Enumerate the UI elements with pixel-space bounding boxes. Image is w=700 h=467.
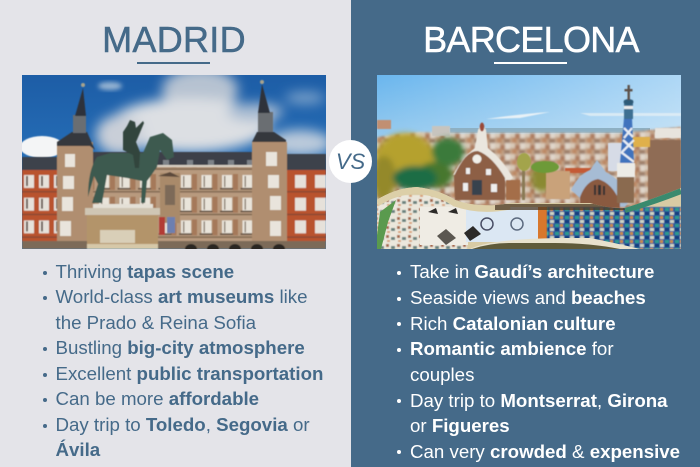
bullet list: Madrid: Bustling big-city atmosphere — [56, 337, 305, 358]
bullet list: Barcelona: Seaside views and beaches — [410, 286, 646, 308]
bullet list: Madrid: World-class art museums like — [56, 286, 308, 307]
panel: Barcelona — [351, 0, 700, 467]
bullet list: Barcelona: Romantic ambience for — [410, 338, 614, 359]
panel: Madrid — [0, 0, 351, 467]
bullet list: Barcelona: or Figueres — [410, 415, 510, 436]
bullet list: Barcelona: Can very crowded & expensive — [410, 440, 680, 462]
left tower — [57, 142, 93, 249]
bullet list: Madrid: Day trip to Toledo, Segovia or — [56, 414, 310, 434]
photo: Park Güell mosaic and city view — [377, 75, 681, 249]
mosaic tower — [616, 163, 634, 203]
bullet list: Madrid: Excellent public transportation — [56, 362, 323, 384]
heading underline: Madrid — [137, 62, 210, 64]
vs badge — [329, 140, 372, 183]
bullet list: Barcelona: Day trip to Montserrat, Girona — [410, 390, 668, 410]
bullet list: Madrid: Ávila — [56, 439, 100, 460]
palm and building — [546, 171, 570, 199]
horse and rider — [88, 133, 174, 203]
vs badge: VS — [336, 149, 365, 174]
gatehouse — [452, 123, 512, 182]
bullet list: Barcelona: Rich Catalonian culture — [410, 312, 616, 334]
bullet list: Barcelona: couples — [410, 364, 474, 384]
pedestal — [87, 215, 158, 249]
bullet list: Madrid — [43, 260, 323, 460]
city — [376, 127, 680, 210]
bullet list: Barcelona: Take in Gaudí’s architecture — [410, 261, 654, 282]
mosaic bench — [376, 185, 680, 249]
right tower — [252, 142, 287, 249]
clouds — [96, 68, 332, 156]
facade — [93, 167, 258, 249]
heading: Barcelona: BARCELONA — [423, 19, 639, 60]
roofs — [22, 157, 58, 170]
bullet list: Madrid: Thriving tapas scene — [56, 260, 234, 282]
second pavilion — [570, 160, 630, 207]
crest and flags — [160, 173, 180, 223]
trees — [372, 133, 552, 200]
arcade — [22, 241, 326, 249]
bullet list: Madrid: Can be more affordable — [56, 388, 259, 409]
bullet list: Barcelona — [397, 261, 680, 462]
heading underline: Barcelona — [494, 62, 567, 64]
bullet list: Madrid: the Prado & Reina Sofia — [56, 312, 256, 332]
photo: Plaza Mayor with equestrian statue — [22, 75, 326, 249]
heading: Madrid: MADRID — [102, 19, 246, 60]
sea — [450, 128, 650, 133]
